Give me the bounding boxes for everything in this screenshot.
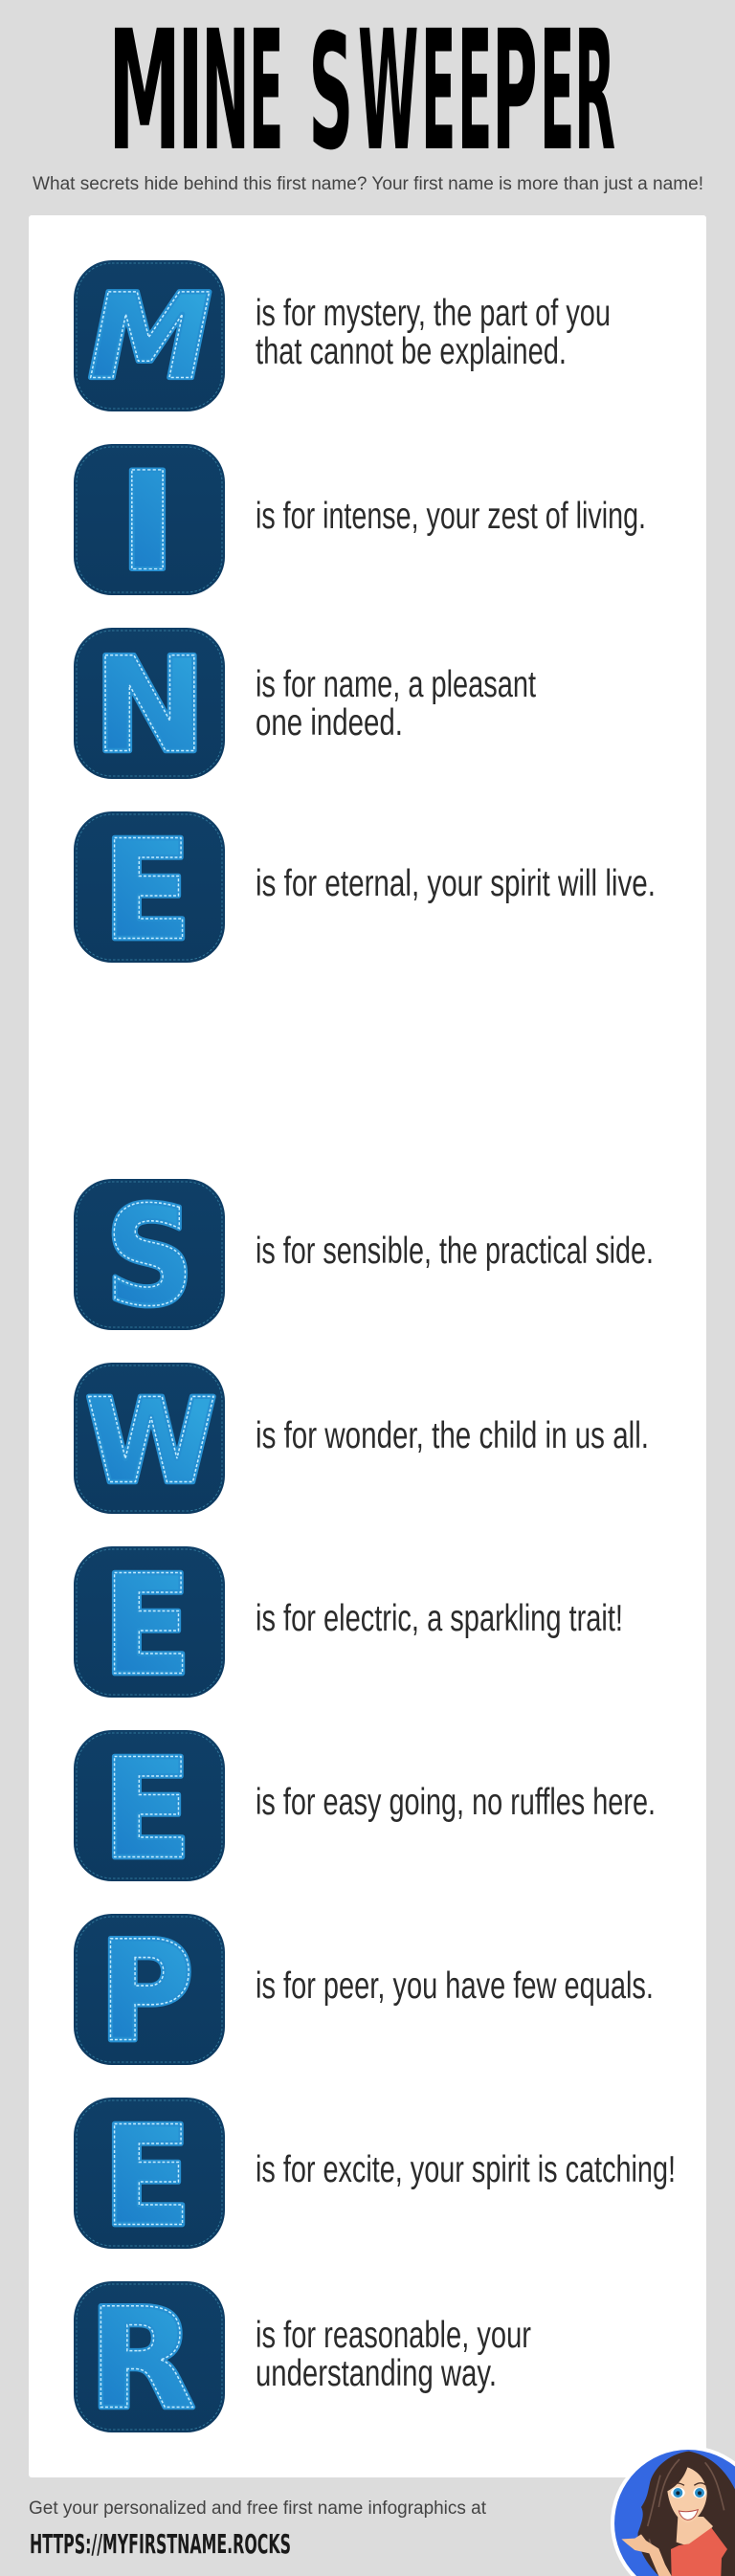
icon: letter E second [74, 1546, 225, 1706]
face [667, 2467, 707, 2523]
icon: letter R: R [88, 2279, 195, 2440]
icon: letter E third [74, 1730, 225, 1890]
row: letter S [74, 1178, 654, 1337]
icon: letter I: I [117, 444, 178, 602]
text: N meaning: is for name, a pleasant [256, 664, 536, 705]
icon: letter P [74, 1912, 225, 2074]
icon: letter E [74, 811, 225, 971]
title [108, 0, 615, 189]
row: letter I [74, 444, 646, 602]
row: letter E third [74, 1730, 656, 1890]
title: P [492, 0, 538, 188]
text: R meaning: understanding way. [256, 2353, 497, 2394]
title: E [421, 0, 456, 189]
row: letter M [74, 260, 611, 411]
icon: letter E: E [102, 811, 192, 971]
icon: letter W: W [85, 1374, 217, 1510]
icon: letter E second: E [102, 1546, 192, 1706]
icon: letter N: N [93, 629, 207, 782]
footer url: HTTPS://MYFIRSTNAME.ROCKS [30, 2529, 291, 2560]
icon: letter E: E [102, 811, 192, 971]
shirt [671, 2528, 727, 2576]
icon: letter I: I [117, 444, 178, 602]
title: E [249, 0, 283, 189]
mouth [679, 2510, 698, 2520]
icon: letter M: M [88, 269, 212, 406]
icon: letter P: P [99, 1912, 194, 2074]
icon: letter E second: E [102, 1546, 192, 1706]
text: M meaning: is for mystery, the part of you [256, 293, 611, 334]
icon: letter E third: E [102, 1730, 192, 1890]
icon: letter M: M [88, 269, 212, 406]
row: letter E second [74, 1546, 623, 1706]
title: W [358, 0, 418, 189]
hair [637, 2452, 735, 2576]
icon: letter N: N [93, 629, 207, 782]
icon: letter S: S [105, 1178, 194, 1337]
title: M [108, 0, 181, 188]
title: S [308, 0, 353, 186]
title: I [177, 0, 204, 189]
icon: letter S: S [105, 1178, 194, 1337]
text: N meaning: one indeed. [256, 702, 403, 744]
row: letter R [74, 2279, 531, 2440]
icon: letter I [74, 444, 225, 602]
text: M meaning: that cannot be explained. [256, 331, 567, 372]
icon: letter E fourth: E [102, 2098, 192, 2257]
eyebrows [671, 2483, 705, 2485]
subtitle: What secrets hide behind this first name? Your first name is more than just a name! [33, 174, 703, 194]
icon: letter E fourth: E [102, 2098, 192, 2257]
title: E [540, 0, 574, 189]
icon: letter E third: E [102, 1730, 192, 1890]
icon: letter P: P [99, 1912, 194, 2074]
neck [677, 2517, 713, 2545]
arm [621, 2534, 672, 2576]
icon: letter R: R [88, 2279, 195, 2440]
icon: letter E fourth [74, 2098, 225, 2257]
icon: avatar woman [611, 2446, 735, 2576]
eyes [671, 2487, 685, 2498]
title: R [574, 0, 615, 189]
text: electric meaning: is for electric, a sparkling trait! [256, 1598, 623, 1639]
icon: letter W: W [85, 1374, 217, 1510]
footer text: Get your personalized and free first name infographics at [29, 2498, 487, 2519]
row: letter E [74, 811, 656, 971]
row: letter W [74, 1363, 649, 1514]
icon: letter S [74, 1178, 225, 1337]
title: E [457, 0, 492, 189]
title: N [201, 0, 250, 188]
row: letter P [74, 1912, 654, 2074]
row: letter N [74, 628, 536, 782]
text: R meaning: is for reasonable, your [256, 2315, 531, 2356]
row: letter E fourth [74, 2098, 676, 2257]
